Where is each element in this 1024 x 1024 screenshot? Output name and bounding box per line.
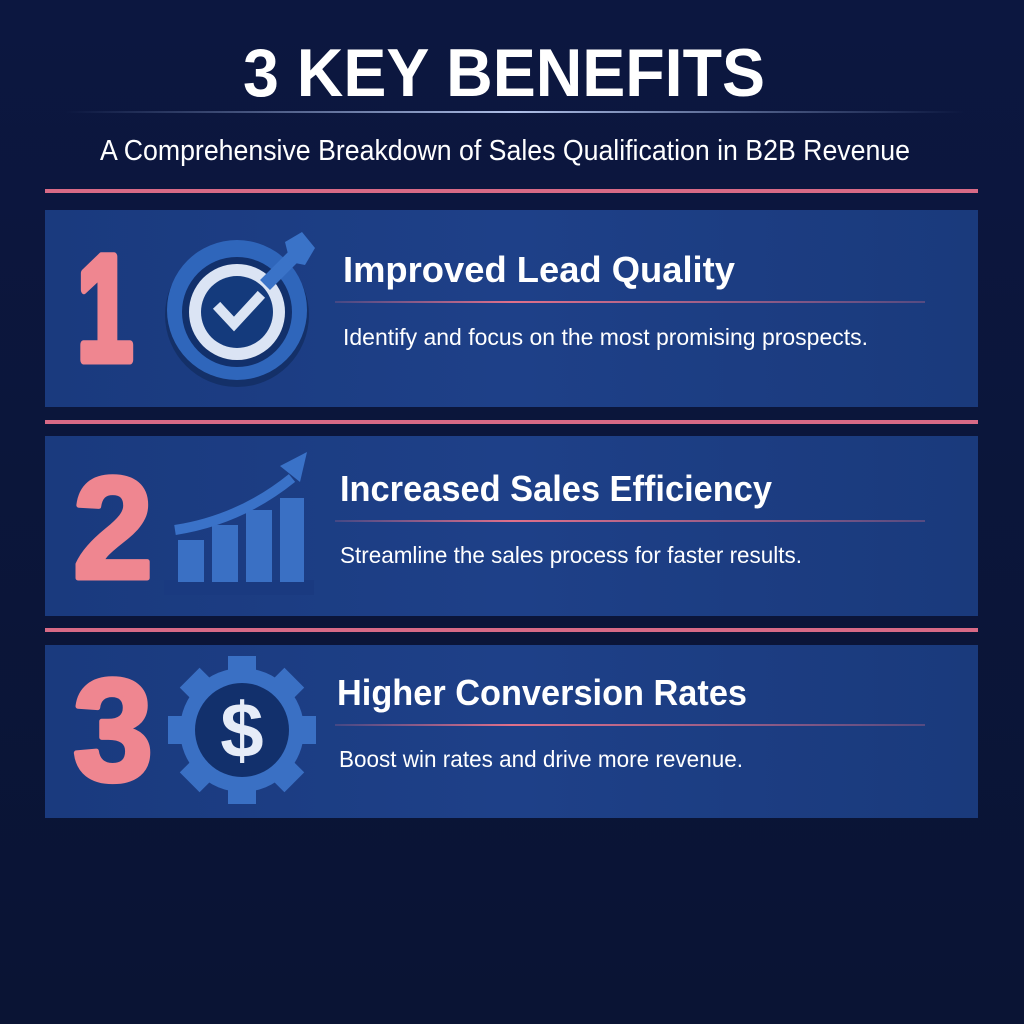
icon: bar chart with arrow: [164, 452, 314, 595]
number 3: 3: [73, 649, 153, 811]
description: Boost win rates and drive more revenue.: [339, 746, 743, 772]
number 2: 2: [73, 447, 153, 609]
panel: higher conversion rates: [45, 645, 978, 818]
description: Identify and focus on the most promising prospects.: [343, 324, 868, 350]
icon: gear with dollar: [168, 656, 316, 804]
heading: Improved Lead Quality: [343, 249, 735, 290]
heading: Increased Sales Efficiency: [340, 468, 772, 509]
heading: Higher Conversion Rates: [337, 672, 747, 713]
number 1: 1: [77, 224, 133, 392]
icon: gear with dollar: $: [220, 686, 264, 774]
description: Streamline the sales process for faster results.: [340, 542, 802, 568]
subtitle: A Comprehensive Breakdown of Sales Qualification in B2B Revenue: [100, 135, 910, 167]
panel: improved lead quality: [45, 210, 978, 407]
title: 3 KEY BENEFITS: [243, 35, 765, 111]
icon: target with check: [165, 232, 315, 387]
panel: increased sales efficiency: [45, 436, 978, 616]
